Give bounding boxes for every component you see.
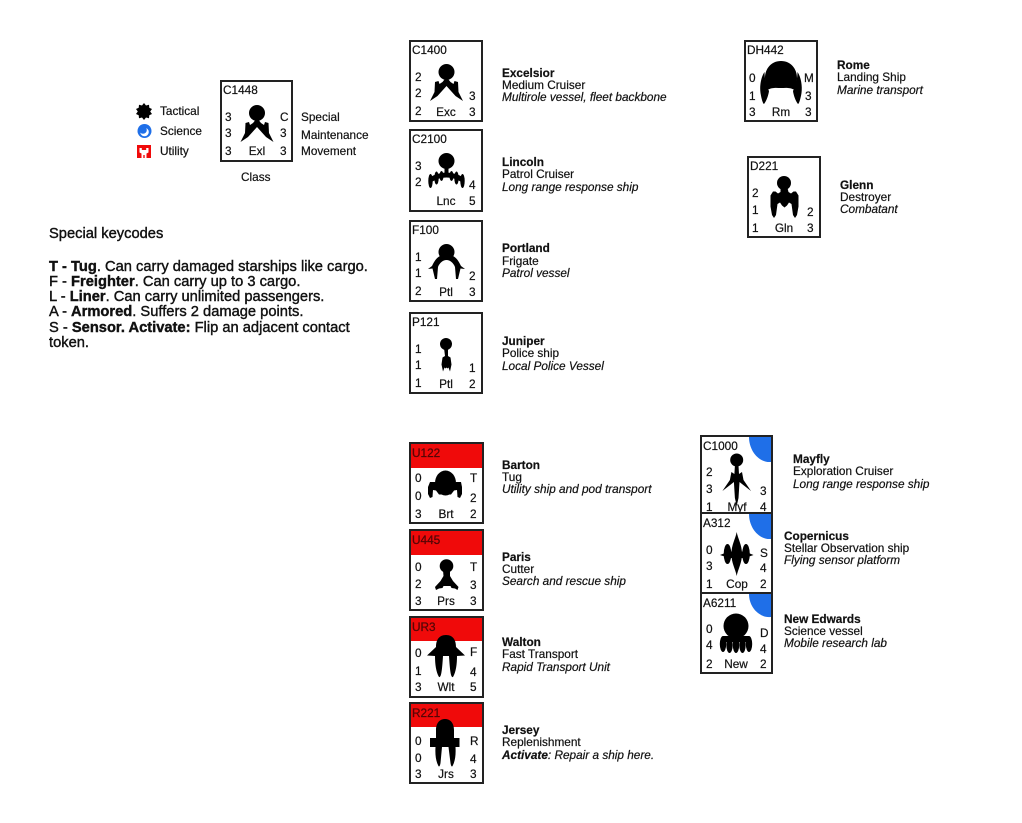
text: special keycodes: L - Liner. Can carry unlimited passengers. [49,289,324,305]
text: Juniper: Local Police Vessel [502,359,604,373]
card: New Edwards: D [760,626,769,640]
card: Rome: DH442 [747,43,784,57]
card: Excelsior [410,41,482,121]
text: Excelsior [502,66,667,104]
card: Juniper: 1 [469,361,476,375]
card: C1448 sample: 3 [225,110,232,124]
card: Rome: 0 [749,71,756,85]
text: special keycodes [49,226,368,351]
text: Barton: Tug [502,470,522,484]
text: special keycodes: T - Tug. Can carry damaged starships like cargo. [49,259,368,275]
card: Portland: 1 [415,250,422,264]
card: Walton: 1 [415,664,422,678]
text: Glenn: Glenn [840,178,873,192]
card: Copernicus: Cop [726,577,748,591]
card: Mayfly: 1 [706,500,713,514]
card: Juniper: 2 [469,377,476,391]
card: Jersey: 3 [470,767,477,781]
text: Barton [502,458,652,496]
blue science corner [749,514,771,539]
card: Rome: M [804,71,814,85]
card: Paris: 3 [415,594,422,608]
text: Walton: Rapid Transport Unit [502,660,611,674]
text: special keycodes: Special keycodes [49,226,163,242]
card: Jersey: 3 [415,767,422,781]
text: Portland: Patrol vessel [502,266,570,280]
label: tactical: Tactical [160,104,199,118]
text: Portland: Frigate [502,254,539,268]
card: Barton: 3 [415,507,422,521]
ship: Portland [428,244,465,279]
label: science: Science [160,124,202,138]
card: Copernicus: 0 [706,543,713,557]
card: Lincoln: C2100 [412,132,447,146]
card: Juniper: 1 [415,358,422,372]
text: Copernicus: Stellar Observation ship [784,541,910,555]
card: Glenn: 2 [807,205,814,219]
text: Paris: Cutter [502,562,534,576]
text: Copernicus: Copernicus [784,529,849,543]
text: Juniper [502,334,604,373]
text: Lincoln [502,155,639,194]
card: Barton: 2 [470,507,477,521]
card: Portland [410,221,482,301]
card: Jersey [410,703,483,783]
card: Lincoln [410,130,482,211]
card: Mayfly: 4 [760,500,767,514]
card: Glenn [748,157,820,237]
card: Paris: 2 [415,577,422,591]
card: Copernicus: S [760,546,768,560]
card: Juniper: 1 [415,376,422,390]
text: Lincoln: Lincoln [502,155,544,169]
text: Barton: Utility ship and pod transport [502,482,652,496]
label: maintenance: Maintenance [301,128,369,142]
ship: Rome [760,61,802,104]
card: Lincoln: 2 [415,175,422,189]
card: Glenn: 2 [752,186,759,200]
card: Excelsior: Exc [436,105,456,119]
text: Excelsior: Medium Cruiser [502,78,585,92]
text: Walton [502,635,611,674]
card: Paris: Prs [437,594,455,608]
card: Excelsior: 2 [415,70,422,84]
card: Barton: T [470,471,477,485]
card: Copernicus: 4 [760,561,767,575]
text: Rome: Landing Ship [837,70,906,84]
card: Mayfly [701,436,772,514]
ship: Paris [435,559,458,590]
card: Rome: 1 [749,89,756,103]
ship: Copernicus [720,532,754,576]
card: Portland: F100 [412,223,439,237]
ship: Walton [427,635,465,677]
card: Paris: U445 [412,533,441,547]
text: New Edwards: Mobile research lab [784,636,887,650]
text: Paris [502,550,626,588]
card: Paris: T [470,560,477,574]
card: Barton: U122 [412,446,440,460]
card: Lincoln: 5 [469,194,476,208]
card: Barton: Brt [438,507,454,521]
card: Lincoln: 4 [469,178,476,192]
card: Copernicus: 3 [706,559,713,573]
card: Rome: Rm [772,105,790,119]
text: Jersey: Replenishment [502,735,581,749]
text: Walton: Fast Transport [502,647,579,661]
card: Excelsior: 3 [469,89,476,103]
card: New Edwards: 0 [706,622,713,636]
card: Walton: 5 [470,680,477,694]
text: Paris: Search and rescue ship [502,574,626,588]
card: New Edwards [701,593,772,673]
card: Juniper: 1 [415,342,422,356]
text: New Edwards [784,612,887,650]
text: special keycodes: token. [49,335,89,351]
card: New Edwards: 4 [706,638,713,652]
label: class: Class [241,170,271,184]
text: Paris: Paris [502,550,531,564]
card: Portland: 3 [469,285,476,299]
card: Juniper [410,313,482,393]
text: Copernicus [784,529,910,567]
text: Glenn: Combatant [840,202,898,216]
card: Glenn: 1 [752,203,759,217]
text: special keycodes: S - Sensor. Activate: Flip an adjacent contact [49,320,350,336]
card: C1448 sample: C1448 [223,83,258,97]
red utility band [411,618,482,641]
card: C1448 sample [221,81,292,161]
card: C1448 sample: 3 [225,126,232,140]
text: Jersey: Activate: Repair a ship here. [501,748,654,762]
card: Walton: 0 [415,646,422,660]
card: Walton: 4 [470,665,477,679]
ship: Excelsior [430,64,463,101]
card: C1448 sample: 3 [280,144,287,158]
card: Walton: 3 [415,680,422,694]
card: Rome: 3 [805,105,812,119]
label: movement: Movement [301,144,357,158]
card: Walton: Wlt [437,680,455,694]
card: Copernicus: A312 [703,516,731,530]
text: Rome: Rome [837,58,870,72]
text: Juniper: Police ship [502,346,559,360]
card: Juniper: Ptl [439,377,453,391]
card: Walton: UR3 [412,620,436,634]
text: Juniper: Juniper [502,334,545,348]
text: Portland [502,241,570,280]
card: Copernicus: 2 [760,577,767,591]
card: Glenn: 1 [752,221,759,235]
card: Mayfly: 3 [760,484,767,498]
text: Copernicus: Flying sensor platform [784,553,900,567]
ship: New Edwards [720,614,752,653]
card: Paris: 3 [470,594,477,608]
text: Jersey: Jersey [502,723,540,737]
card: New Edwards: A6211 [703,596,736,610]
card: Excelsior: 3 [469,105,476,119]
ship: Mayfly [722,454,751,506]
card: Copernicus [701,513,772,593]
icon: science [138,124,152,138]
card: Jersey: 0 [415,751,422,765]
ship: Glenn [770,176,798,218]
text: Lincoln: Long range response ship [502,180,639,194]
text: Mayfly: Mayfly [793,452,830,466]
card: Lincoln: Lnc [436,194,456,208]
card: Mayfly: 2 [706,465,713,479]
text: Mayfly [793,452,930,491]
ship: Lincoln [428,153,465,188]
red utility band [411,531,482,555]
card: Barton: 0 [415,489,422,503]
card: Portland: 1 [415,266,422,280]
text: Portland: Portland [502,241,550,255]
card: Mayfly: C1000 [703,439,738,453]
ship: Excelsior silhouette [240,105,274,142]
card: Mayfly: 3 [706,482,713,496]
card: Excelsior: 2 [415,104,422,118]
card: Copernicus: 1 [706,577,713,591]
text: special keycodes: F - Freighter. Can carry up to 3 cargo. [49,274,300,290]
icon: utility [137,145,151,158]
card: Paris: 3 [470,578,477,592]
card: C1448 sample: 3 [225,144,232,158]
card: Jersey: 0 [415,734,422,748]
text: special keycodes: A - Armored. Suffers 2 damage points. [49,304,303,320]
card: Juniper: P121 [412,315,440,329]
card: Glenn: Gln [775,221,793,235]
card: Rome: 3 [749,105,756,119]
card: Barton: 2 [470,491,477,505]
red utility band [411,444,482,468]
card: Portland: Ptl [439,285,453,299]
text: Excelsior: Multirole vessel, fleet backbone [502,90,667,104]
card: New Edwards: 2 [760,657,767,671]
card: Excelsior: 2 [415,86,422,100]
label: utility: Utility [160,144,189,158]
card: Rome: 3 [805,89,812,103]
text: Glenn [840,178,898,216]
blue science corner [749,437,771,462]
card: Rome [745,41,817,121]
card: Walton [410,617,483,697]
card: Jersey: Jrs [438,767,454,781]
card: C1448 sample: C [280,110,289,124]
card: Mayfly: Myf [727,500,747,514]
card: C1448 sample: Exl [249,144,265,158]
text: New Edwards: New Edwards [784,612,861,626]
red utility band [411,704,482,727]
icon: tactical [136,103,152,120]
card: Walton: F [470,645,477,659]
text: Walton: Walton [502,635,541,649]
card: C1448 sample: 3 [280,126,287,140]
card: New Edwards: New [724,657,748,671]
panel: legend [136,103,369,184]
text: Mayfly: Long range response ship [793,477,930,491]
text: Jersey [501,723,654,762]
ship: Jersey [430,719,460,766]
card: Glenn: D221 [750,159,778,173]
card: Paris [410,530,483,610]
label: special: Special [301,110,340,124]
text: Barton: Barton [502,458,540,472]
ship: Barton [428,470,462,498]
text: New Edwards: Science vessel [784,624,863,638]
text: Glenn: Destroyer [840,190,891,204]
text: Rome [837,58,924,97]
card: Barton: 0 [415,471,422,485]
card: Jersey: R221 [412,706,440,720]
card: Barton [410,443,483,523]
card: New Edwards: 4 [760,642,767,656]
card: Portland: 2 [469,269,476,283]
blue science corner [749,594,771,617]
text: Mayfly: Exploration Cruiser [793,464,893,478]
text: Excelsior: Excelsior [502,66,555,80]
text: Rome: Marine transport [837,83,924,97]
card: Portland: 2 [415,284,422,298]
card: Lincoln: 3 [415,159,422,173]
card: Glenn: 3 [807,221,814,235]
ship: Juniper [440,338,452,372]
card: Jersey: 4 [470,752,477,766]
card: New Edwards: 2 [706,657,713,671]
card: Paris: 0 [415,560,422,574]
card: Excelsior: C1400 [412,43,447,57]
card: Jersey: R [470,734,479,748]
text: Lincoln: Patrol Cruiser [502,167,574,181]
